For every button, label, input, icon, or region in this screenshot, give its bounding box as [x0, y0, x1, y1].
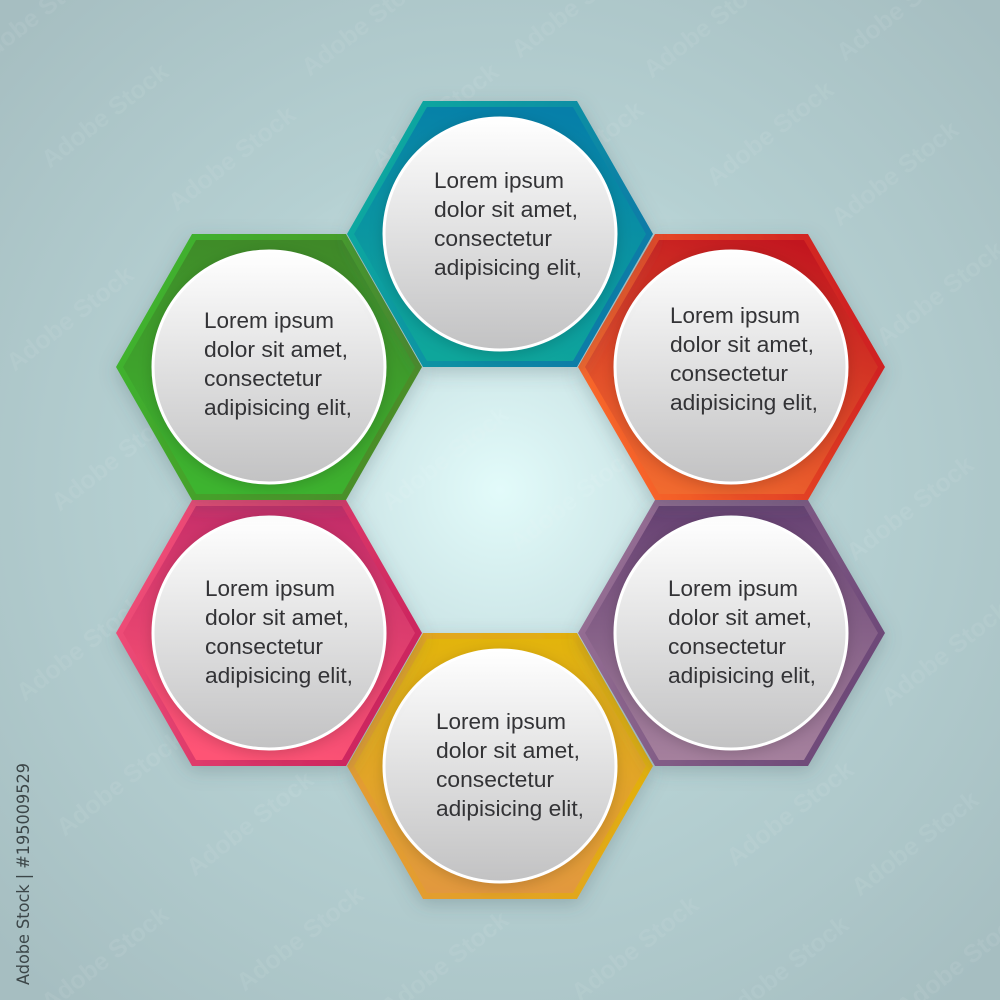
stock id label: Adobe Stock | #195009529 — [14, 763, 33, 985]
text: pink: consectetur — [205, 634, 323, 659]
text: purple: Lorem ipsum — [668, 576, 798, 601]
text: purple — [668, 576, 816, 688]
watermark pattern: Adobe Stock — [846, 786, 984, 902]
watermark pattern: Adobe Stock — [504, 441, 642, 557]
watermark pattern: Adobe Stock — [46, 401, 184, 517]
watermark pattern: Adobe Stock — [51, 726, 189, 842]
text: yellow: adipisicing elit, — [436, 796, 584, 821]
text: pink: Lorem ipsum — [205, 576, 335, 601]
watermark pattern: Adobe Stock — [721, 756, 859, 872]
text: green — [204, 308, 352, 420]
text: teal — [434, 168, 582, 280]
text: red: Lorem ipsum — [670, 303, 800, 328]
text: green: dolor sit amet, — [204, 337, 348, 362]
text: red: adipisicing elit, — [670, 390, 818, 415]
text: yellow: consectetur — [436, 767, 554, 792]
text: yellow: Lorem ipsum — [436, 709, 566, 734]
watermark pattern: Adobe Stock — [181, 766, 319, 882]
panel: yellow hexagon — [347, 633, 653, 899]
text: green: adipisicing elit, — [204, 395, 352, 420]
text: red: consectetur — [670, 361, 788, 386]
watermark pattern: Adobe Stock — [1, 261, 139, 377]
text: red: dolor sit amet, — [670, 332, 814, 357]
text: teal: adipisicing elit, — [434, 255, 582, 280]
text: green: Lorem ipsum — [204, 308, 334, 333]
text: green: consectetur — [204, 366, 322, 391]
watermark pattern: Adobe Stock — [701, 76, 839, 192]
text: purple: dolor sit amet, — [668, 605, 812, 630]
watermark pattern: Adobe Stock — [376, 401, 514, 517]
text: teal: consectetur — [434, 226, 552, 251]
text: pink: dolor sit amet, — [205, 605, 349, 630]
text: teal: Lorem ipsum — [434, 168, 564, 193]
text: red — [670, 303, 818, 415]
watermark pattern: Adobe Stock — [11, 591, 149, 707]
text: purple: adipisicing elit, — [668, 663, 816, 688]
panel: teal hexagon — [347, 101, 653, 367]
watermark pattern: Adobe Stock — [163, 101, 301, 217]
panel: pink hexagon — [116, 500, 422, 766]
text: yellow — [436, 709, 584, 821]
watermark pattern: Adobe Stock — [511, 96, 649, 212]
panel: purple hexagon — [578, 500, 885, 766]
watermark pattern: Adobe Stock — [36, 58, 174, 174]
watermark pattern: Adobe Stock — [231, 881, 369, 997]
text: pink — [205, 576, 353, 688]
text: teal: dolor sit amet, — [434, 197, 578, 222]
text: yellow: dolor sit amet, — [436, 738, 580, 763]
panel: green hexagon — [116, 234, 422, 500]
text: pink: adipisicing elit, — [205, 663, 353, 688]
text: purple: consectetur — [668, 634, 786, 659]
panel: red hexagon — [578, 234, 885, 500]
watermark pattern: Adobe Stock — [826, 116, 964, 232]
watermark pattern: Adobe Stock — [841, 451, 979, 567]
watermark pattern: Adobe Stock — [366, 58, 504, 174]
